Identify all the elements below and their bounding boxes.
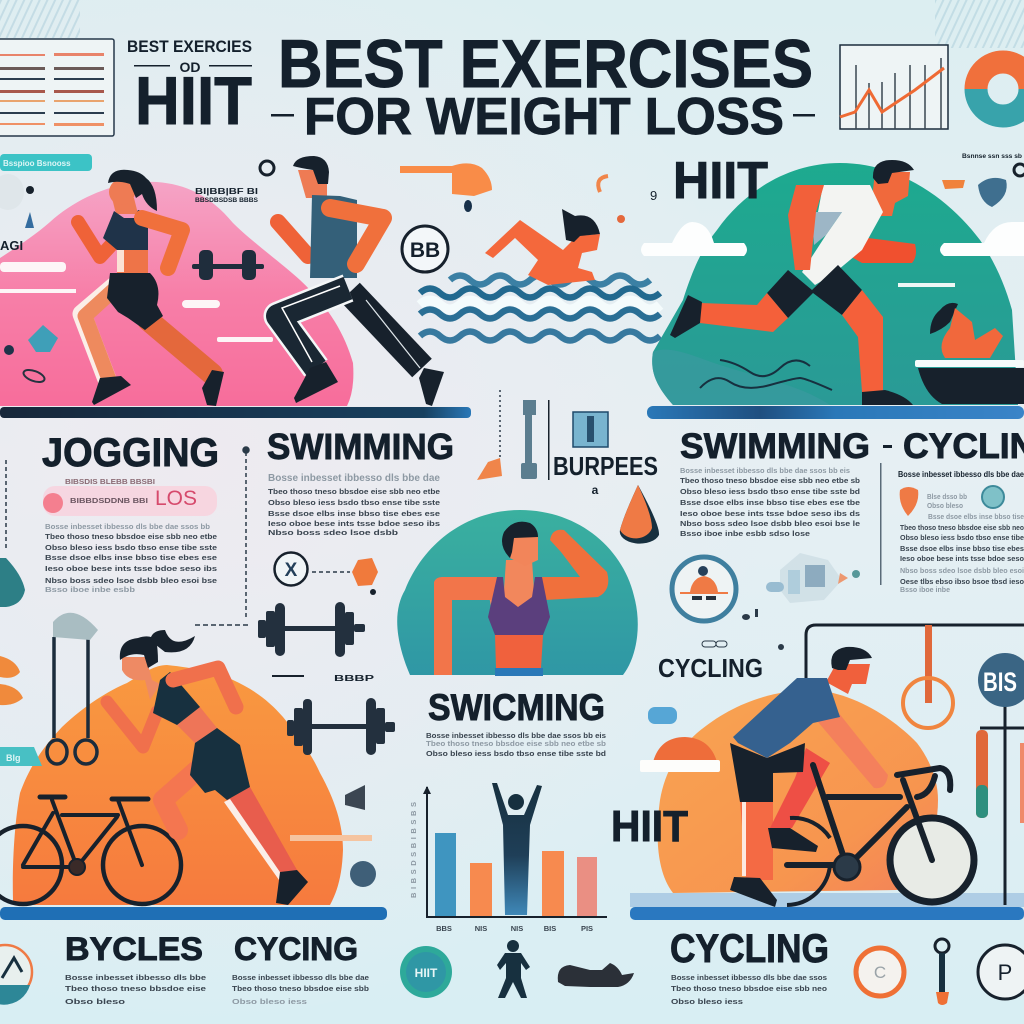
text block: bottom left: Bosse inbesset ibbesso dls bbe <box>65 973 206 982</box>
text block: swimming cycling: Ieso oboe bese ints tsse bdoe seso ibs ds <box>680 509 860 518</box>
text block: jogging <box>43 477 217 594</box>
ground bar <box>0 407 471 418</box>
text block: swimming left: Bsse dsoe elbs inse bbso tise ebes ese <box>268 509 440 518</box>
swimmer body <box>485 220 600 285</box>
panel: shoulder stretch figure <box>397 510 638 676</box>
dumbbell <box>192 250 264 280</box>
text block: swimming left <box>268 473 440 537</box>
centre dumbbell <box>258 602 365 657</box>
heading: cycling small: CYCLING <box>658 653 763 683</box>
text block: swimming cycling: Bsso iboe inbe <box>900 585 950 594</box>
donut chart top right <box>976 62 1024 116</box>
icon: X badge <box>274 552 350 586</box>
text block: swimming cycling <box>680 463 1024 594</box>
text block: swimming left: Nbso boss sdeo lsoe dsbb <box>268 528 399 537</box>
heading: cycling left: CYCING <box>234 931 358 967</box>
floating icons upper right: Bsnnse ssn sss sb <box>962 154 1022 160</box>
text block: swimming left: Obso bleso iess bsdo tbso ense tibe sste <box>268 498 440 507</box>
small tag <box>648 707 677 724</box>
bar chart: BIS <box>544 924 556 933</box>
icon: BB badge: BB <box>410 239 440 262</box>
text block: swimming cycling: Obso bleso <box>927 501 963 510</box>
table icon top left <box>0 39 114 136</box>
dotted line and orange marker <box>477 390 502 480</box>
floating small marks: 9 <box>650 188 657 203</box>
text block: swimming cycling: Nbso boss sdeo lsoe dsbb bleo esoi bse le <box>680 519 860 528</box>
text block: bottom centre-left: Tbeo thoso tneso bbsdoe eise sbb <box>232 984 369 993</box>
text block: jogging: Tbeo thoso tneso bbsdoe eise sbb neo etbe <box>45 532 217 541</box>
floating icons upper left: Bsspioo Bsnooss <box>3 159 71 168</box>
floating icons upper right <box>942 154 1024 207</box>
lower-left shade <box>652 350 830 405</box>
bicycle <box>787 765 974 905</box>
small caption under dumbbell: BBBP <box>334 674 375 683</box>
text block: bottom left <box>65 973 206 1006</box>
panel: swimmer <box>420 209 660 340</box>
text block: swimming cycling: Ieso oboe bese ints tsse bdoe seso <box>900 554 1024 563</box>
text block: jogging: Bosse inbesset ibbesso dls bbe dae ssos bb <box>45 522 210 531</box>
heading: burpees: a <box>592 483 599 497</box>
white bars <box>0 262 273 342</box>
subtitle: best exercises of HIIT <box>127 37 252 139</box>
subtitle: best exercises of HIIT: BEST EXERCIES <box>127 37 252 56</box>
ground <box>647 406 1024 419</box>
small caption: BI|BB|BF BI <box>195 187 258 196</box>
heading: jogging: JOGGING <box>42 431 219 475</box>
man runner <box>278 156 444 406</box>
floating ring top <box>260 161 274 175</box>
lower left dumbbell <box>287 698 395 755</box>
dashed connector <box>6 447 250 625</box>
text block: bottom centre-left <box>232 973 369 1006</box>
text block: swimming cycling: Bosse inbesset ibbesso dls bbe dae ssos bb eis <box>680 466 850 475</box>
text block: swimming cycling: Bsso iboe inbe esbb sdso lose <box>680 529 810 538</box>
sign <box>978 653 1024 707</box>
heading: swimming center: SWICMING <box>428 687 605 728</box>
icon: target camera <box>672 557 736 621</box>
subtitle: best exercises of HIIT: HIIT <box>135 63 252 139</box>
rings <box>47 637 97 764</box>
icon: orange drop <box>620 485 659 544</box>
floating icons upper left: AGI <box>0 238 23 253</box>
text block: bottom right: Bosse inbesset ibbesso dls bbe dae ssos <box>671 973 827 982</box>
icon: X badge: X <box>285 560 298 581</box>
text block: jogging: BIBSDIS BLEBB BBSBI <box>65 477 155 486</box>
floating icons upper left <box>0 154 92 384</box>
text block: swimming cycling: Oese tlbs ebso ibso bsoe tbsd ieso <box>900 577 1024 586</box>
text block: swimming center: Bosse inbesset ibbesso dls bbe dae ssos bb eis <box>426 731 606 740</box>
small marks <box>702 609 784 650</box>
icon: grey machine <box>766 553 860 603</box>
cyclist <box>730 647 888 907</box>
bar chart: BBS <box>436 924 452 933</box>
icon: P ring: P <box>998 960 1012 985</box>
floating orange shape <box>400 163 492 196</box>
heading: swimming cycling <box>680 427 1024 466</box>
icon: orange ring <box>856 948 904 996</box>
heading: HIIT upper: HIIT <box>673 152 768 210</box>
icon: HIIT badge: HIIT <box>415 966 438 980</box>
icon: lying figure <box>558 963 634 987</box>
heading: burpees: BURPEES <box>553 451 658 481</box>
text block: swimming cycling: Obso bleso iess bsdo tbso ense tibe sste bd <box>680 487 860 496</box>
text block: bottom right <box>671 973 827 1006</box>
text block: jogging: LOS <box>155 487 197 510</box>
bar chart: PIS <box>581 924 593 933</box>
waves <box>420 276 660 340</box>
left edge icon <box>0 558 25 607</box>
panel: jogging runners <box>0 156 471 418</box>
clouds <box>641 222 747 256</box>
text block: bottom centre-left: Obso bleso iess <box>232 997 307 1006</box>
bar chart: BIBSDSBIBSBS <box>409 802 418 898</box>
text block: swimming left: Ieso oboe bese ints tsse bdoe seso ibs <box>268 519 440 528</box>
text block: swimming cycling: Bsse dsoe elbs inse bbso tise ebes ese tbe <box>680 498 860 507</box>
small teal tag: Blg <box>6 753 20 763</box>
icon: tool <box>521 400 537 479</box>
text block: bottom left: Obso bleso <box>65 997 126 1006</box>
heading: swimming cycling: SWIMMING <box>680 427 870 466</box>
gym frame and rings <box>806 625 1024 678</box>
icon: swimmer badge <box>0 945 32 1005</box>
text block: swimming center: Obso bleso iess bsdo tbso ense tibe sste bd <box>426 749 606 758</box>
text block: swimming left: Bosse inbesset ibbesso dls bbe dae <box>268 473 440 484</box>
text block: swimming center: Tbeo thoso tneso bbsdoe eise sbb neo etbe sb <box>426 739 606 748</box>
title <box>271 26 815 146</box>
small caption: BBSDBSDSB BBBS <box>195 198 258 204</box>
icon: P ring <box>978 945 1024 999</box>
text block: jogging: BIBBDSDDNB BBI <box>70 496 148 505</box>
left edge orange blobs <box>0 656 23 705</box>
small caption under dumbbell <box>272 674 375 683</box>
pink hill <box>0 182 353 406</box>
floating small marks <box>598 176 657 223</box>
text block: swimming cycling: Blse dsso bb <box>927 492 967 501</box>
title: BEST EXERCISES <box>278 26 813 102</box>
small icons near woman <box>345 785 376 887</box>
icon: HIIT badge <box>400 946 452 998</box>
text block: swimming left: Tbeo thoso tneso bbsdoe eise sbb neo etbe <box>268 487 440 496</box>
icon: walking figure <box>497 940 530 998</box>
icon: key <box>935 939 949 1005</box>
text block: bottom right: Tbeo thoso tneso bbsdoe eise sbb neo <box>671 984 827 993</box>
dome and bar <box>653 737 717 762</box>
text block: jogging: Bsse dsoe elbs inse bbso tise ebes ese <box>45 553 217 562</box>
bar chart: NIS <box>475 924 487 933</box>
title: FOR WEIGHT LOSS <box>304 88 784 146</box>
heading: bicycles: BYCLES <box>65 931 203 967</box>
ground <box>0 907 387 920</box>
bar chart: NIS <box>511 924 523 933</box>
panel: HIIT runner <box>641 160 1024 419</box>
text block: bottom right: Obso bleso iess <box>671 997 743 1006</box>
line chart top right <box>840 45 948 129</box>
text block: bottom left: Tbeo thoso tneso bbsdoe eise <box>65 984 206 993</box>
bar chart <box>409 783 607 933</box>
bike <box>0 797 181 904</box>
panel: cycling man <box>630 625 1024 920</box>
text block: jogging: Nbso boss sdeo lsoe dsbb bleo esoi bse <box>45 576 217 585</box>
text block: swimming center <box>426 731 606 758</box>
heading: burpees <box>548 400 658 497</box>
subtitle: best exercises of HIIT: OD <box>180 59 200 75</box>
runner <box>670 160 916 405</box>
text block: bottom centre-left: Bosse inbesset ibbesso dls bbe dae <box>232 973 369 982</box>
small teal tag <box>0 747 42 766</box>
icon: orange ring: C <box>874 963 886 982</box>
panel: running woman with bike <box>0 613 387 920</box>
icon: droplet small <box>464 200 472 212</box>
ground <box>630 893 1024 907</box>
heading: swimming left: SWIMMING <box>267 426 454 467</box>
heading: HIIT lower: HIIT <box>611 802 688 851</box>
orange hexagon <box>352 558 378 595</box>
boat figure <box>915 303 1024 404</box>
text block: jogging: Ieso oboe bese ints tsse bdoe seso ibs <box>45 564 217 573</box>
icon: BB badge <box>402 226 448 272</box>
wave lines <box>700 360 832 390</box>
swimmer hair <box>562 209 600 242</box>
woman runner <box>78 170 224 406</box>
woman <box>107 630 308 905</box>
small caption <box>195 187 258 204</box>
icon: blue box <box>573 412 608 447</box>
text block: jogging: Bsso iboe inbe esbb <box>45 585 136 594</box>
text block: swimming cycling: Bsse dsoe elbs inse bbso tise ebes <box>900 544 1024 553</box>
text block: swimming cycling: Tbeo thoso tneso bbsdoe eise sbb neo etbe sb <box>680 476 860 485</box>
text block: jogging: Obso bleso iess bsdo tbso ense tibe sste <box>45 543 217 552</box>
orange dash right of woman <box>290 835 372 841</box>
heading: cycling bottom: CYCLING <box>670 927 829 971</box>
